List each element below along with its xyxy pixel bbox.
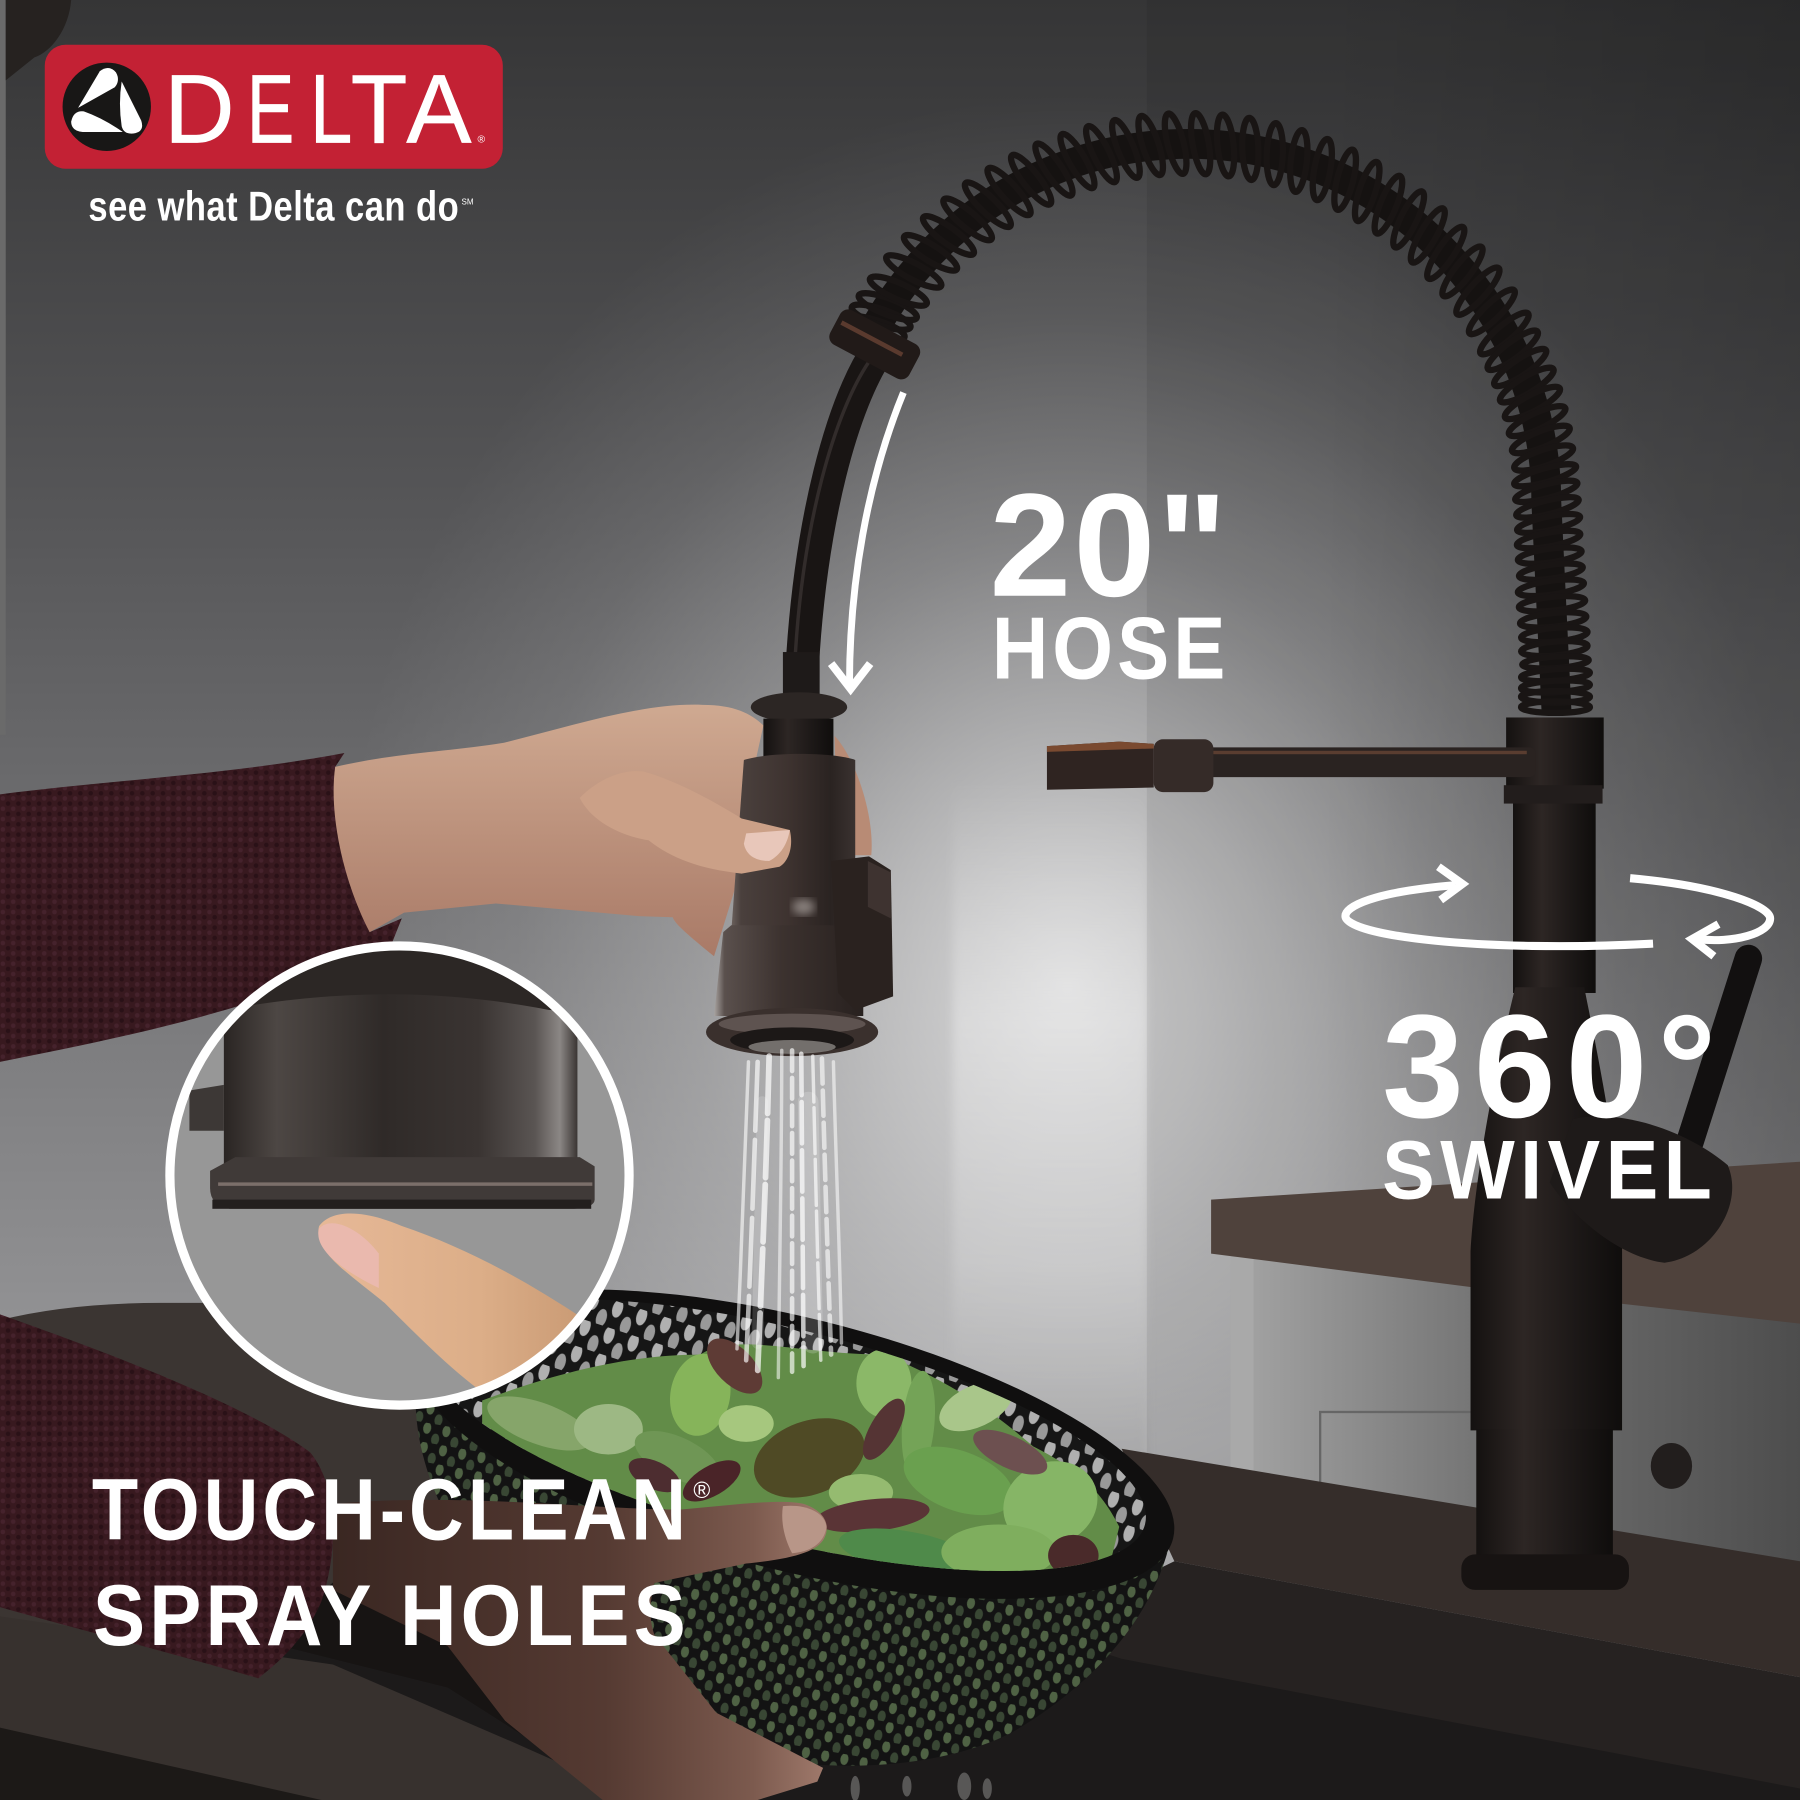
label: 20 inch hose: 20" xyxy=(990,464,1227,628)
pull-down hose xyxy=(794,350,878,683)
label: 360 degree swivel: 360° xyxy=(1382,985,1716,1149)
sweater lower arm xyxy=(0,1314,333,1678)
swivel rotation arrows xyxy=(1345,867,1770,956)
zoomed sprayer base xyxy=(189,930,595,1209)
wordmark: L xyxy=(310,54,352,164)
logo emblem xyxy=(63,63,151,151)
water spray xyxy=(737,1050,841,1378)
left front counter xyxy=(0,1616,643,1800)
callout: touch-clean zoom circle xyxy=(170,930,629,1406)
hose core of faucet spring xyxy=(878,144,1557,714)
label: touch-clean spray holes: ® xyxy=(693,1477,710,1503)
counter front edge xyxy=(1033,1561,1800,1789)
wordmark: D xyxy=(164,54,235,163)
wordmark: A xyxy=(406,54,471,163)
thumb over sprayer xyxy=(580,771,791,874)
wordmark: T xyxy=(351,55,407,164)
drips below colander xyxy=(851,1772,992,1800)
Delta logo badge xyxy=(45,45,503,169)
fingers behind sprayer xyxy=(835,736,872,855)
hand holding sprayer xyxy=(334,705,872,956)
wordmark xyxy=(164,54,471,164)
Delta logo badge: ® xyxy=(478,134,486,145)
foreground counter top right xyxy=(1122,1449,1800,1677)
left back counter xyxy=(0,1303,643,1630)
hose length arrow xyxy=(831,393,903,689)
label: 20 inch hose xyxy=(990,464,1229,697)
sprayer head xyxy=(706,652,893,1056)
tagline: SM xyxy=(461,197,474,206)
label: 360 degree swivel: SWIVEL xyxy=(1382,1122,1717,1216)
dark gap under arm xyxy=(264,1573,712,1800)
colander lower mesh xyxy=(416,1395,1171,1766)
lower hand xyxy=(333,1500,827,1800)
label: 20 inch hose: HOSE xyxy=(992,598,1229,697)
label: touch-clean spray holes: TOUCH-CLEAN xyxy=(92,1461,690,1558)
tagline: see what Delta can do xyxy=(88,183,459,229)
faucet body xyxy=(1461,717,1629,1590)
palm and fingers xyxy=(334,705,763,956)
spring rings xyxy=(843,112,1590,713)
base dark floor xyxy=(0,1492,1800,1800)
zoomed fingertip xyxy=(318,1214,576,1387)
wordmark: E xyxy=(247,56,294,164)
coil end cap xyxy=(826,306,923,383)
spout holder arm xyxy=(1047,739,1536,792)
label: touch-clean spray holes xyxy=(92,1461,710,1664)
faucet lever handle xyxy=(1550,959,1748,1263)
thumbnail xyxy=(744,830,790,861)
sweater upper arm xyxy=(0,753,402,1062)
right cabinet and back counter xyxy=(1211,1162,1800,1596)
left lower counter band xyxy=(0,1728,321,1800)
colander interior and salad xyxy=(456,1300,1146,1571)
colander rim xyxy=(385,1227,1204,1661)
label: touch-clean spray holes: SPRAY HOLES xyxy=(93,1568,690,1664)
